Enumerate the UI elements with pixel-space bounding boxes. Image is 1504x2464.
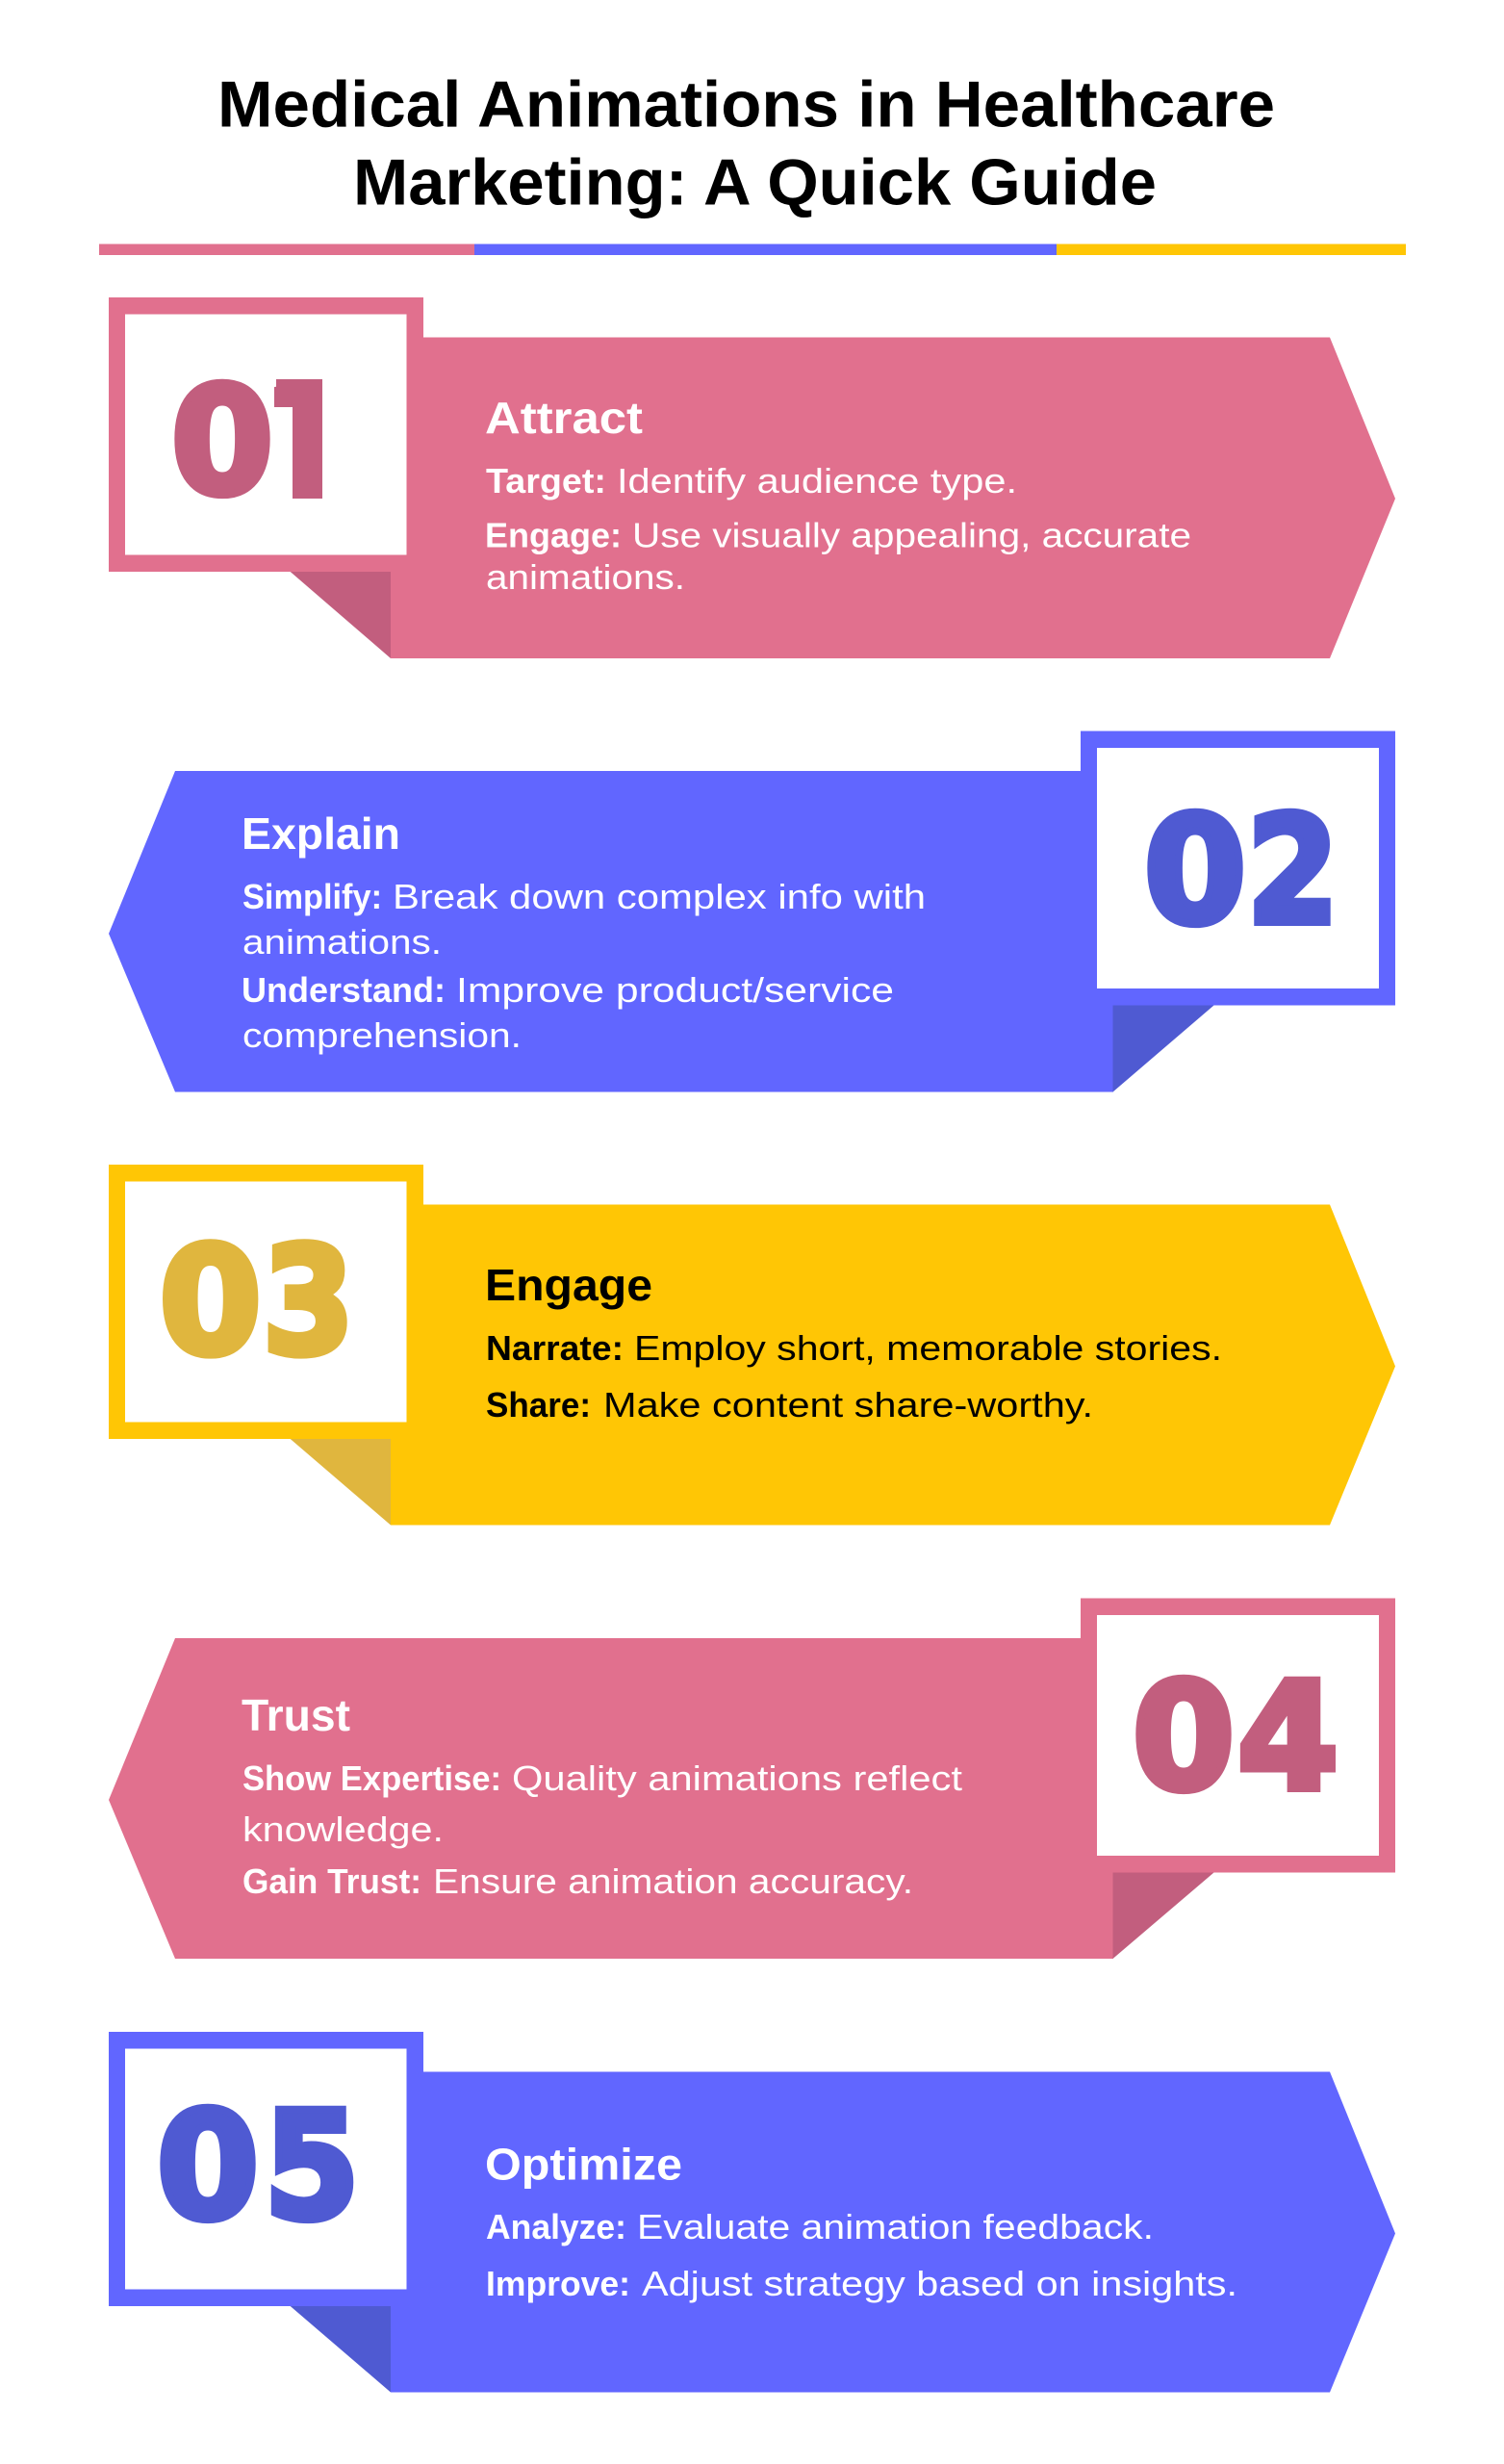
text block: Improve product/service [456,970,894,1010]
text block: Understand: [242,970,446,1010]
text block: Show Expertise: [242,1758,501,1798]
banner arrow [391,2071,1395,2393]
text block: Gain Trust: [242,1861,421,1901]
number 05: 5 [264,2081,360,2253]
text block [485,1260,1222,1424]
text block: Optimize [485,2139,682,2189]
text block: animations. [486,557,685,597]
number 01 [174,379,322,499]
banner arrow [109,771,1113,1091]
number 01: 1 [253,358,356,530]
number 04: 4 [1237,1652,1338,1824]
text block: Trust [242,1690,350,1740]
banner arrow [109,1638,1113,1959]
fold shadow [291,1439,391,1525]
text block: Identify audience type. [617,461,1017,500]
title [217,67,1275,219]
text block: Break down complex info with [393,877,926,916]
text block: Make content share-worthy. [603,1385,1093,1424]
text block [242,1690,962,1901]
number 02 [1144,785,1338,958]
number 04 [1133,1652,1338,1824]
text block: Ensure animation accuracy. [433,1861,913,1901]
text block [242,808,926,1055]
banner arrow [391,1205,1395,1525]
panel: 01 attract [109,297,1395,658]
text block: animations. [242,922,442,962]
banner arrow [391,337,1395,658]
text block [485,2139,1237,2303]
tricolour divider [99,244,1406,255]
text block: Use visually appealing, accurate [632,516,1191,554]
text block: Adjust strategy based on insights. [642,2264,1237,2303]
text block: Target: [486,461,606,500]
number 03: 0 [160,1217,262,1388]
number box [109,1165,423,1439]
number 05 [157,2081,360,2253]
text block: Evaluate animation feedback. [637,2207,1154,2246]
text block: Attract [485,393,643,443]
text block: Quality animations reflect [512,1758,962,1798]
panel: 05 optimize [109,2032,1395,2393]
text block: Engage [485,1260,652,1310]
number 03 [160,1217,354,1388]
number 01: 0 [171,356,273,528]
title: Medical Animations in Healthcare [217,67,1275,141]
text block: Narrate: [486,1328,624,1368]
fold shadow [1112,1005,1214,1091]
text block [485,393,1191,597]
number box [1081,732,1395,1005]
number box [109,297,423,572]
title: Marketing: A Quick Guide [353,146,1157,219]
text block: comprehension. [242,1015,522,1055]
text block: Improve: [486,2264,630,2303]
number 02: 0 [1144,785,1246,958]
number box [109,2032,423,2306]
number box [1081,1598,1395,1873]
text block: Analyze: [486,2207,626,2246]
text block: Explain [242,808,400,859]
panel: 02 explain [109,732,1395,1091]
panel: 04 trust [109,1598,1395,1959]
text block: Engage: [485,516,622,554]
text block: Simplify: [242,877,382,916]
fold shadow [291,572,391,658]
fold shadow [1112,1873,1214,1959]
panel: 03 engage [109,1165,1395,1525]
text block: Employ short, memorable stories. [634,1328,1222,1368]
number 03: 3 [263,1217,354,1388]
number 04: 0 [1133,1652,1235,1824]
number 02: 2 [1247,785,1338,958]
number 05: 0 [157,2081,259,2253]
text block: Share: [486,1385,591,1424]
text block: knowledge. [242,1810,444,1849]
fold shadow [291,2306,391,2393]
